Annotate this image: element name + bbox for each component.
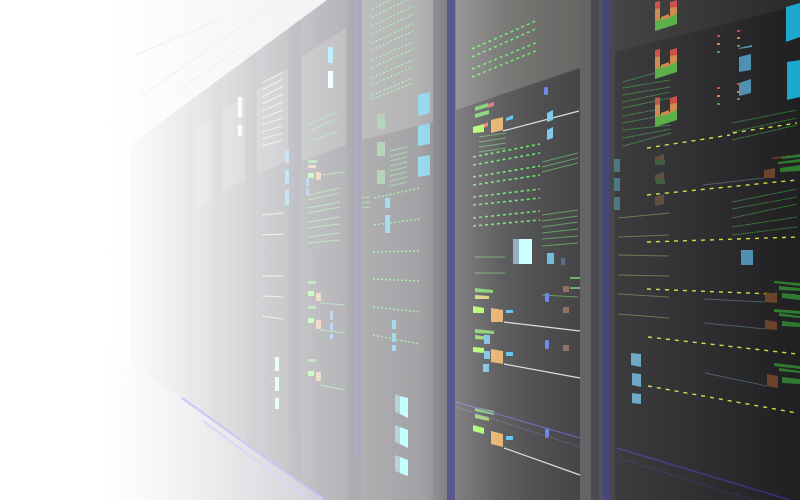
green rows: rack B [362,147,407,208]
blue boxes: right rack [739,45,753,265]
blue post stripes [355,0,609,500]
lower blue boxes: right rack [631,353,641,404]
equalizer 2 [655,48,677,79]
bright floor stripes [182,398,323,499]
faded equalizers [655,154,665,206]
bright boxes: rack A, B, C, D [238,47,532,476]
dim teal boxes: right rack [614,159,620,210]
LED rows: rack D [262,72,283,319]
shaded box sides: rack B [395,394,400,473]
rack top panels [196,0,580,210]
status dots: right rack [717,30,740,105]
server unit 2: rack A [473,277,580,331]
status block: rack A [513,239,565,265]
equalizer 3 [655,96,677,127]
equalizers: rack B [377,114,385,184]
light blue boxes: rack B [385,92,430,351]
floor edge blue stripes [456,402,790,500]
green rows: rack A [475,133,578,297]
equalizer 1 [655,0,677,31]
ceiling tile lines [135,0,278,97]
blue boxes: rack D [285,150,289,205]
LED rows: rack A middle [473,144,540,226]
server unit 3: rack A [473,329,580,378]
rack frame posts [247,0,615,500]
server unit 4: rack A [473,407,580,475]
LED rows: rack C [308,112,345,390]
green rows: right rack [623,73,797,235]
server unit 1: rack A [473,87,579,140]
LED rows: right rack yellow-green [647,123,797,413]
floor [0,300,323,500]
LED rows: rack B [372,0,420,344]
cyan boxes: right rack [786,3,800,100]
units: rack C [306,160,333,381]
LED rows: rack A top panel [472,20,538,77]
right rack top panel [615,0,800,52]
server units: right rack [618,154,800,388]
